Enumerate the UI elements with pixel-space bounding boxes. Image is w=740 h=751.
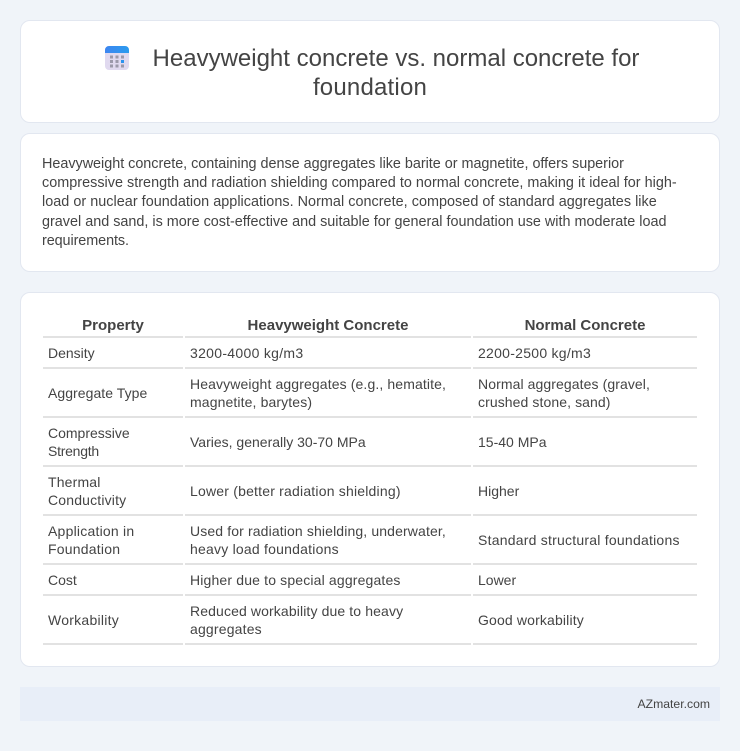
heading: title: Heavyweight concrete vs. normal concrete for: [153, 45, 639, 72]
table header: [82, 317, 645, 334]
heading: title: [153, 45, 639, 101]
icon: calendar: [105, 46, 129, 70]
row: compressive strength: [48, 425, 547, 459]
row: density: 2200-2500 kg/m3: [478, 345, 591, 361]
text block: summary paragraph: gravel and sand, is more cost-effective and suitable for general foundation use with moderate load: [42, 214, 667, 230]
row: application in foundation: Application in: [48, 523, 134, 539]
panel: summary card: [20, 133, 720, 272]
row: aggregate type: Aggregate Type: [48, 385, 147, 401]
row: application in foundation: [48, 523, 680, 557]
panel: title card: [20, 20, 720, 123]
row: thermal conductivity: Lower (better radiation shielding): [190, 483, 401, 499]
row: compressive strength: 15-40 MPa: [478, 434, 546, 450]
table: comparison: [43, 317, 697, 645]
text block: summary paragraph: Heavyweight concrete, containing dense aggregates like barite or magnetite, offers superior: [42, 156, 624, 172]
row: workability: Reduced workability due to heavy: [190, 603, 403, 619]
row: aggregate type: Normal aggregates (gravel,: [478, 376, 650, 392]
row: workability: [48, 603, 584, 637]
text block: summary paragraph: compressive strength and radiation shielding compared to normal concrete, making it ideal for high-: [42, 175, 677, 191]
row: density: Density: [48, 345, 95, 361]
row: aggregate type: [48, 376, 650, 410]
row: workability: aggregates: [190, 621, 262, 637]
row: workability: Workability: [48, 612, 119, 628]
row: aggregate type: Heavyweight aggregates (e.g., hematite,: [190, 376, 446, 392]
row: density: [48, 345, 591, 361]
row: thermal conductivity: Higher: [478, 483, 519, 499]
table header: Property: [82, 317, 144, 334]
panel: comparison table card: [20, 292, 720, 667]
row: aggregate type: crushed stone, sand): [478, 394, 611, 410]
row: aggregate type: magnetite, barytes): [190, 394, 312, 410]
row: compressive strength: Varies, generally 30-70 MPa: [190, 434, 366, 450]
row: application in foundation: Used for radiation shielding, underwater,: [190, 523, 446, 539]
row: application in foundation: Standard structural foundations: [478, 532, 680, 548]
row: compressive strength: Strength: [48, 443, 99, 459]
row: application in foundation: Foundation: [48, 541, 120, 557]
table header: Heavyweight Concrete: [248, 317, 408, 334]
footer bar: [20, 687, 720, 721]
row: cost: [48, 572, 516, 588]
text block: summary paragraph: requirements.: [42, 233, 129, 249]
row: density: 3200-4000 kg/m3: [190, 345, 303, 361]
text block: summary paragraph: load or nuclear foundation applications. Normal concrete, composed of standard aggregates like: [42, 194, 657, 210]
row: cost: Cost: [48, 572, 77, 588]
table header: Normal Concrete: [525, 317, 645, 334]
row: application in foundation: heavy load foundations: [190, 541, 339, 557]
row: cost: Higher due to special aggregates: [190, 572, 401, 588]
row: workability: Good workability: [478, 612, 584, 628]
heading: title: foundation: [313, 74, 427, 101]
row: compressive strength: Compressive: [48, 425, 130, 441]
row: thermal conductivity: Conductivity: [48, 492, 126, 508]
footer text: site name: AZmater.com: [638, 697, 710, 711]
row: cost: Lower: [478, 572, 516, 588]
row: thermal conductivity: [48, 474, 520, 508]
row: thermal conductivity: Thermal: [48, 474, 101, 490]
text block: summary paragraph: [42, 156, 677, 249]
